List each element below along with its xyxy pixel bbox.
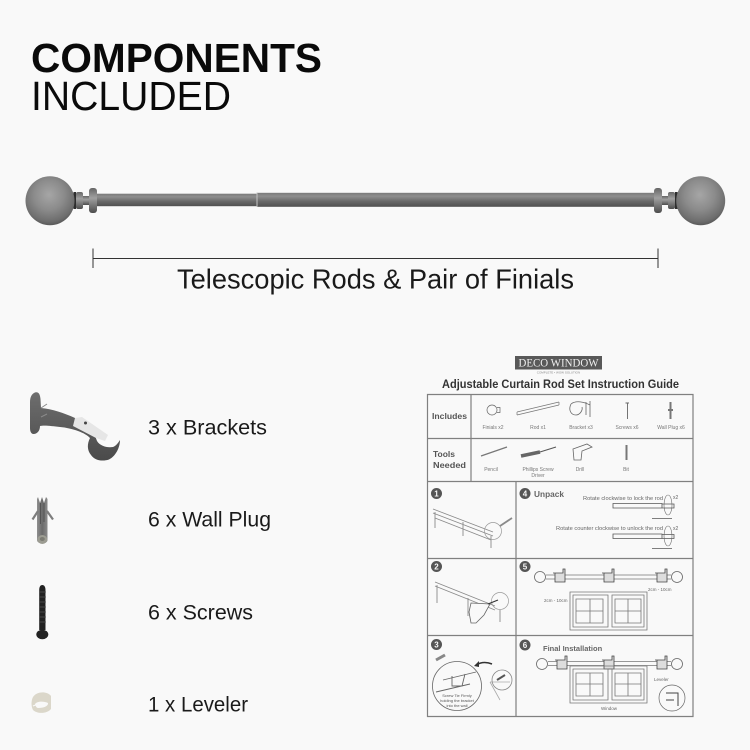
step 4: unpack: Rotate clockwise to lock the rod bbox=[583, 496, 663, 502]
label: leveler: 1 x Leveler bbox=[148, 692, 248, 716]
step 6: final installation bbox=[520, 640, 685, 711]
step 4: unpack bbox=[520, 488, 678, 548]
step 6: final installation: Final Installation bbox=[543, 644, 603, 653]
icon: leveler bbox=[32, 692, 51, 713]
tools row bbox=[433, 444, 630, 479]
tools row: Driver bbox=[531, 473, 545, 479]
step 5: 5 bbox=[523, 562, 528, 572]
includes row: Bracket x3 bbox=[569, 425, 593, 431]
tools row: Pencil bbox=[484, 467, 498, 473]
step 3: Screw Tie Firmly bbox=[442, 693, 472, 698]
tools row: Phillips Screw bbox=[522, 467, 554, 473]
step 5: 2cm - 10cm bbox=[648, 587, 672, 592]
step 5 bbox=[520, 561, 682, 630]
step 3: into the wall bbox=[446, 703, 468, 708]
brand logo: COMPLETE • WOW SOLUTION bbox=[537, 370, 580, 374]
step 3: holding the bracket bbox=[440, 698, 475, 703]
instruction guide heading: Adjustable Curtain Rod Set Instruction Guide bbox=[442, 379, 679, 391]
step 5: 2cm - 10cm bbox=[544, 598, 568, 603]
icon: wall plug bbox=[32, 497, 53, 544]
includes row: Includes bbox=[432, 411, 467, 421]
includes row: Rod x1 bbox=[530, 425, 546, 431]
step 2: 2 bbox=[434, 562, 439, 572]
label: screws: 6 x Screws bbox=[148, 600, 253, 624]
brand logo: DECO WINDOW bbox=[518, 358, 599, 370]
rod caption: Telescopic Rods & Pair of Finials bbox=[177, 264, 574, 294]
title: COMPONENTS bbox=[31, 35, 322, 81]
tools row: Needed bbox=[433, 460, 466, 470]
step 3 bbox=[431, 639, 512, 710]
instruction guide panel bbox=[428, 394, 693, 716]
step 4: unpack: 4 bbox=[523, 490, 528, 498]
dimension line bbox=[93, 248, 658, 268]
step 4: unpack: x2 bbox=[673, 495, 678, 501]
label: brackets: 3 x Brackets bbox=[148, 416, 267, 440]
telescopic rod with finials bbox=[26, 176, 725, 225]
icon: screw bbox=[36, 585, 48, 639]
step 4: unpack: x2 bbox=[673, 526, 678, 532]
tools row: Drill bbox=[576, 467, 584, 473]
step 4: unpack: Rotate counter clockwise to unlock the rod bbox=[556, 526, 663, 532]
step 6: final installation: Leveler bbox=[654, 677, 669, 682]
brand logo bbox=[515, 356, 602, 374]
title bbox=[31, 35, 322, 119]
title: INCLUDED bbox=[31, 73, 231, 119]
tools row: Bit bbox=[623, 467, 630, 473]
label: wall plug: 6 x Wall Plug bbox=[148, 508, 271, 532]
grid lines bbox=[428, 394, 693, 716]
step 6: final installation: 6 bbox=[523, 641, 528, 650]
step 3: 3 bbox=[434, 640, 439, 650]
includes row: Screws x6 bbox=[615, 425, 639, 431]
includes row: Finials x2 bbox=[482, 425, 504, 431]
includes row bbox=[432, 401, 685, 431]
includes row: Wall Plug x6 bbox=[657, 425, 685, 431]
tools row: Tools bbox=[433, 449, 455, 459]
step 1: 1 bbox=[434, 490, 439, 498]
icon: bracket bbox=[30, 392, 120, 461]
step 1 bbox=[431, 488, 512, 548]
step 2 bbox=[431, 561, 508, 623]
step 6: final installation: Window bbox=[601, 706, 618, 711]
step 4: unpack: Unpack bbox=[534, 489, 564, 499]
